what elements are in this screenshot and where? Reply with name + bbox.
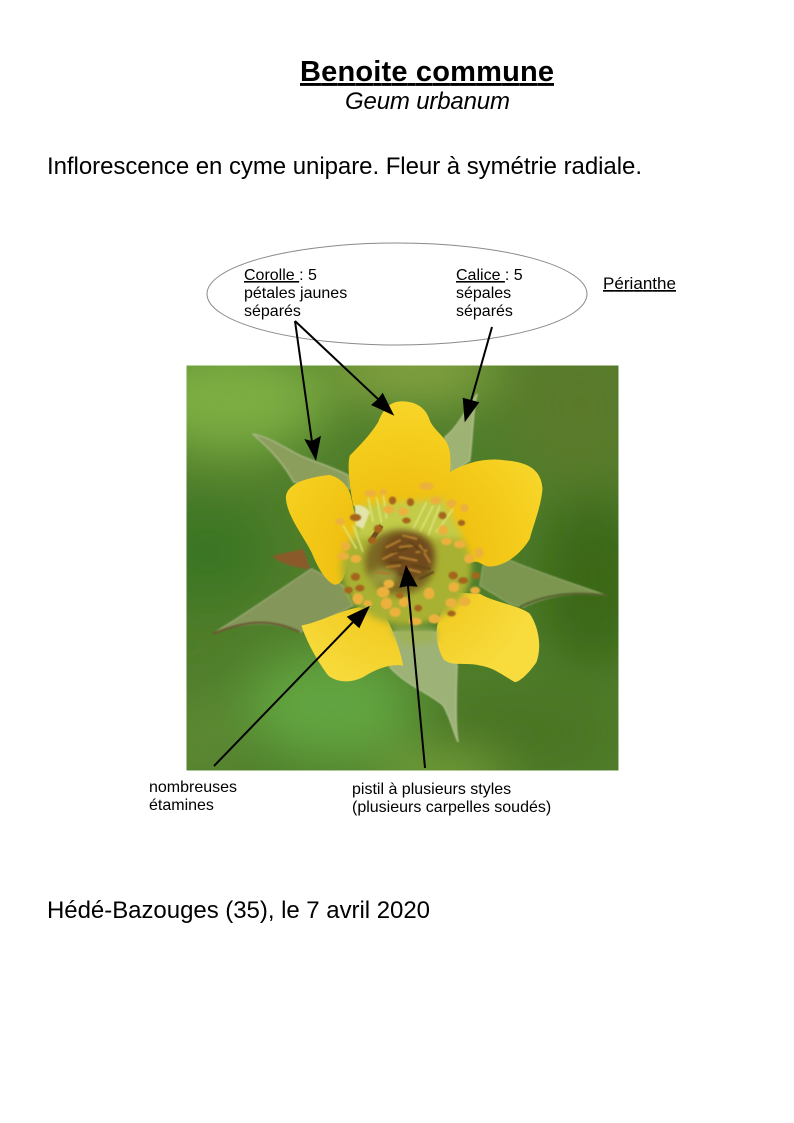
label: corolle: séparés — [244, 303, 301, 320]
sepal: lower left — [212, 569, 353, 634]
label: calice — [456, 267, 523, 320]
sepal: right — [480, 559, 606, 607]
sepal: upper right — [445, 394, 477, 474]
arrow: corolle to top petal — [295, 321, 394, 416]
description text: Inflorescence en cyme unipare. Fleur à symétrie radiale. — [47, 153, 642, 180]
petal: lower left — [301, 607, 403, 681]
label: pistil — [352, 781, 551, 816]
flower centre: green receptacle — [341, 494, 471, 645]
petal: lower right — [436, 592, 539, 682]
label: corolle: Corolle : 5 — [244, 267, 317, 284]
pistil: brown styles — [365, 525, 435, 595]
subtitle: latin name: Geum urbanum — [345, 88, 510, 115]
arrow: corolle to sepal-side petal — [295, 321, 321, 461]
petal: top — [348, 401, 450, 510]
label: calice: Calice : 5 — [456, 267, 523, 284]
label: calice: séparés — [456, 303, 513, 320]
photo: flower of Geum urbanum — [186, 366, 618, 770]
label: calice: sépales — [456, 285, 511, 302]
title: Benoite commune — [300, 56, 554, 88]
oval: perianth grouping — [207, 243, 587, 345]
label: corolle — [244, 267, 347, 320]
location and date: Hédé-Bazouges (35), le 7 avril 2020 — [47, 897, 430, 924]
petal: left — [286, 475, 360, 585]
arrow: pistil to styles — [399, 565, 425, 768]
label: périanthe: Périanthe — [603, 274, 676, 293]
label: pistil: pistil à plusieurs styles — [352, 781, 511, 798]
sepal: upper left — [252, 434, 350, 489]
label: étamines: nombreuses — [149, 779, 237, 796]
sepal: brown bud — [272, 549, 310, 569]
filaments — [343, 494, 453, 552]
sepal: bottom — [390, 632, 458, 742]
arrow: calice to sepal — [463, 327, 492, 422]
label: pistil: (plusieurs carpelles soudés) — [352, 799, 551, 816]
label: corolle: pétales jaunes — [244, 285, 347, 302]
stamens: anthers — [335, 482, 483, 625]
petal: right — [439, 460, 542, 566]
arrow: étamines to stamen — [214, 606, 370, 766]
label: étamines: étamines — [149, 797, 214, 814]
label: étamines — [149, 779, 237, 814]
